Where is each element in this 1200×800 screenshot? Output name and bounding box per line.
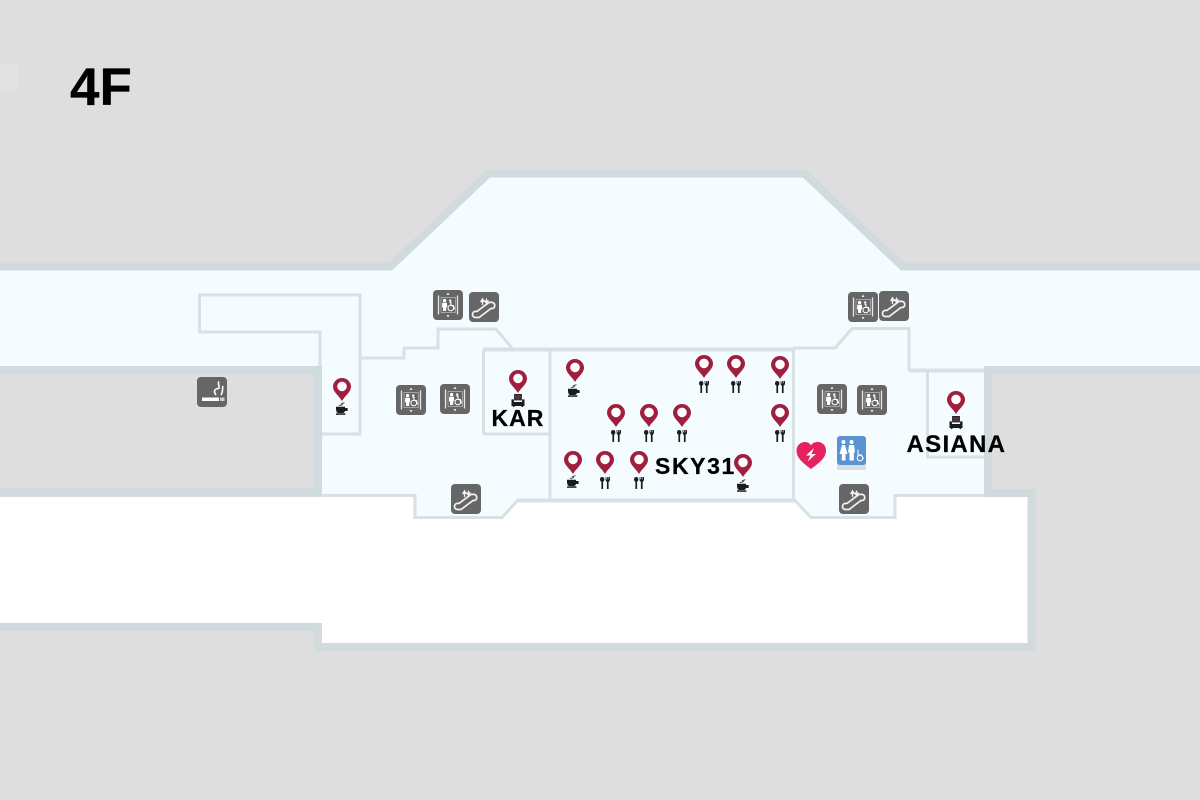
- icon: restrooms: [837, 436, 866, 470]
- icon: elevator left 2: [440, 384, 470, 414]
- icon: elevator right 1: [817, 384, 847, 414]
- pin: SKY31 restaurant 3: [771, 356, 789, 393]
- inner walls: [200, 295, 985, 518]
- pin: SKY31 restaurant 6: [673, 404, 691, 442]
- terminal concourse floor: [0, 177, 1200, 518]
- pin: cafe west: [333, 378, 351, 415]
- title: floor label: 4F: [70, 58, 132, 117]
- pin: SKY31 restaurant 4: [607, 404, 625, 442]
- pin: KAR lounge: [509, 370, 527, 407]
- pin: SKY31 cafe 2: [564, 451, 582, 488]
- white airside block: [0, 497, 1028, 643]
- icon: elevator upper left: [433, 290, 463, 320]
- pin: ASIANA lounge: [947, 391, 965, 429]
- pin: SKY31 restaurant 7: [771, 404, 789, 442]
- label: ASIANA: ASIANA: [906, 431, 1006, 458]
- icon: escalator lower right: [839, 484, 869, 514]
- icon: elevator left 1: [396, 385, 426, 415]
- pin: SKY31 restaurant 9: [630, 451, 648, 489]
- pin: SKY31 restaurant 8: [596, 451, 614, 489]
- pin: SKY31 cafe 1: [566, 359, 584, 397]
- icon: elevator right 2: [857, 385, 887, 415]
- icon: escalator upper right: [879, 291, 909, 321]
- label: SKY31: SKY31: [655, 453, 736, 479]
- pin: SKY31 restaurant 2: [727, 355, 745, 393]
- pin: SKY31 restaurant 1: [695, 355, 713, 393]
- icon: smoking room: [197, 377, 227, 407]
- icon: escalator lower left: [451, 484, 481, 514]
- pin: SKY31 restaurant 5: [640, 404, 658, 442]
- icon: elevator upper right: [848, 292, 878, 322]
- label: KAR: KAR: [492, 405, 544, 431]
- outer walls: [0, 174, 1200, 647]
- pin: SKY31 cafe 3: [734, 454, 752, 492]
- icon: AED heart: [796, 442, 826, 469]
- icon: escalator upper left: [469, 292, 499, 322]
